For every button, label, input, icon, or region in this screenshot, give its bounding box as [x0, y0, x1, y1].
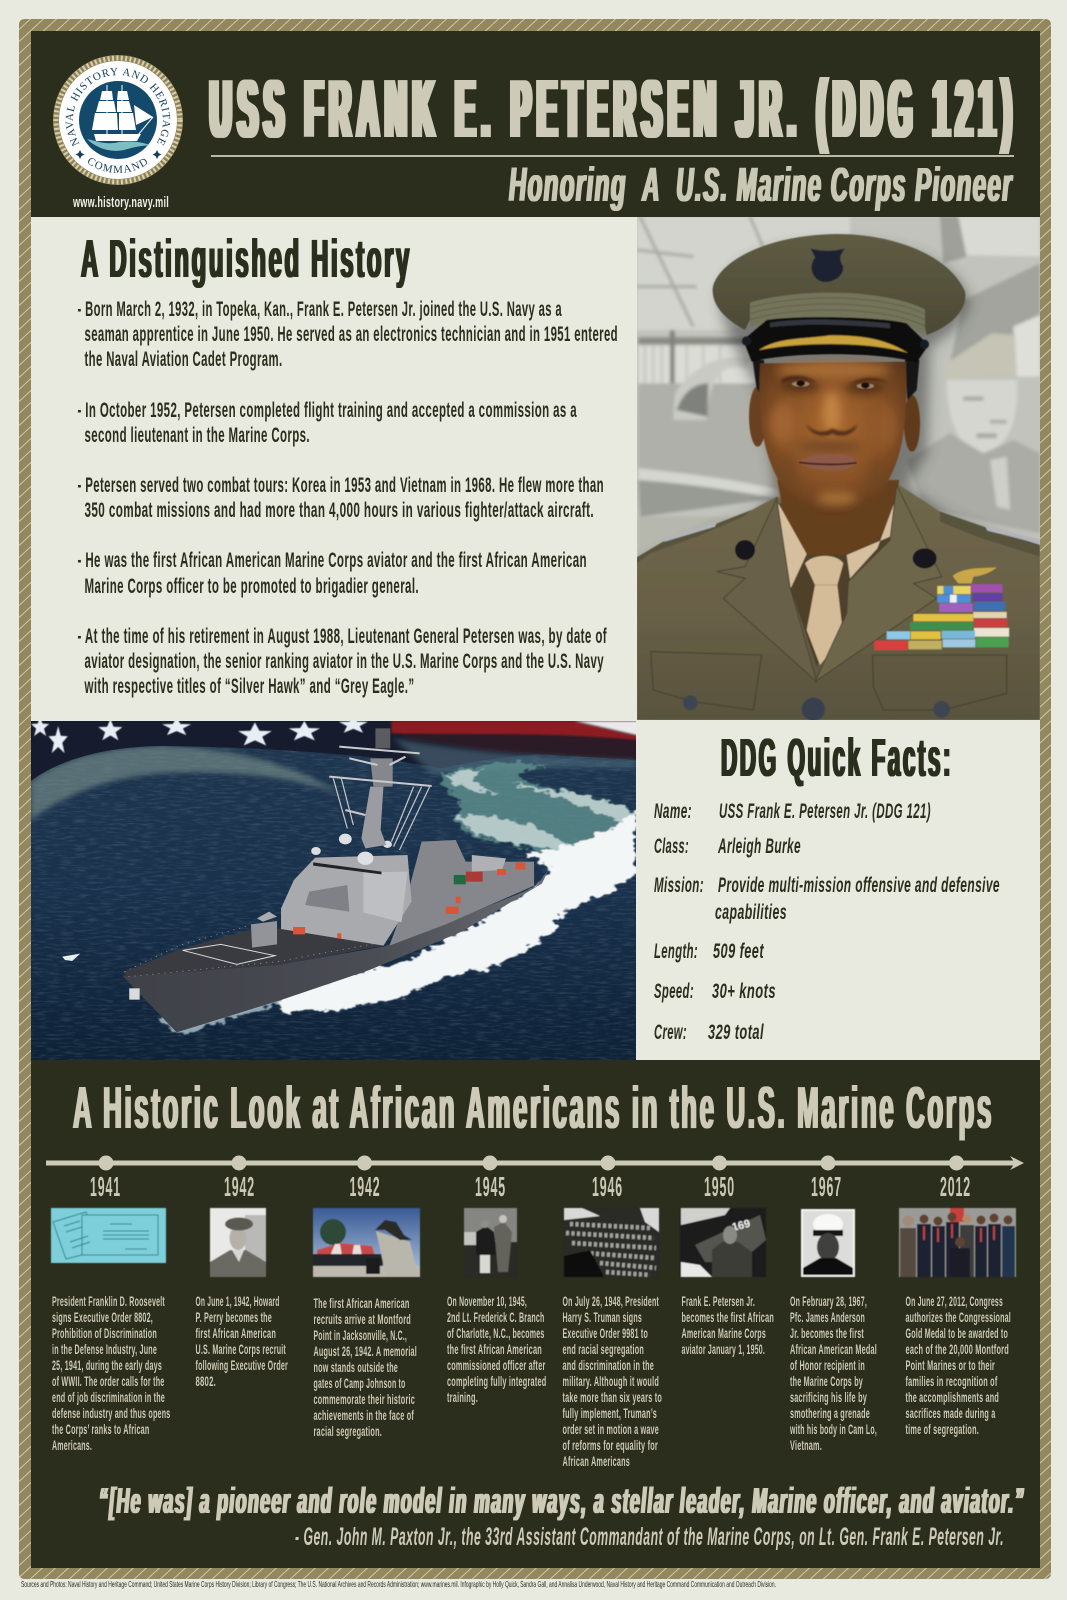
text: birth and enlistment [78, 298, 618, 371]
panel: a distinguished history: A Distinguished History [81, 229, 412, 289]
fact: mission: Mission: [654, 874, 704, 897]
text: 1945 Frederick C. Branch: training. [447, 1390, 478, 1405]
text: 1946 Truman order: Executive Order 9981 to [562, 1326, 648, 1341]
text: 1945 Frederick C. Branch: 2nd Lt. Frederick C. Branch [447, 1310, 544, 1325]
text: 1967 James Anderson Jr.: the Marine Corps by [790, 1374, 863, 1389]
text: 1967 James Anderson Jr. [789, 1294, 877, 1453]
text: 1967 James Anderson Jr.: with his body in Cam Lo, [789, 1422, 877, 1437]
text: 1967 James Anderson Jr.: smothering a grenade [790, 1406, 870, 1421]
text: 1942 Howard P. Perry: following Executive Order [196, 1358, 288, 1373]
text: first African American aviator: - He was the first African American Marine Corps aviator and the first African American [78, 549, 587, 572]
text: 1946 Truman order [562, 1294, 662, 1469]
text: 1942 Howard P. Perry: U.S. Marine Corps recruit [196, 1342, 286, 1357]
text: 1941 Executive Order 8802: of WWII. The order calls for the [52, 1374, 165, 1389]
text: 1942 Montford Point: gates of Camp Johnson to [314, 1376, 406, 1391]
thumbnail: Petersen with aircraft: 169 [731, 1218, 752, 1234]
fact: speed [654, 980, 776, 1003]
text: 1942 Montford Point: The first African American [314, 1296, 410, 1311]
text: 1946 Truman order: take more than six years to [562, 1390, 662, 1405]
text: commission: - In October 1952, Petersen completed flight training and accepted a commission as a [78, 399, 577, 422]
fact: mission: capabilities [715, 901, 787, 924]
text: 1942 Howard P. Perry: first African American [196, 1326, 276, 1341]
text: 1950 Petersen aviator: American Marine Corps [682, 1326, 766, 1341]
text: commission: second lieutenant in the Marine Corps. [84, 424, 310, 447]
text: 1942 Montford Point: August 26, 1942. A memorial [314, 1344, 417, 1359]
text: 1941 Executive Order 8802: 25, 1941, during the early days [52, 1358, 162, 1373]
text: 1945 Frederick C. Branch: completing fully integrated [447, 1374, 546, 1389]
text: 1967 James Anderson Jr.: of Honor recipient in [790, 1358, 865, 1373]
text: 1941 Executive Order 8802: signs Executive Order 8802, [52, 1310, 153, 1325]
text: retirement: with respective titles of “Silver Hawk” and “Grey Eagle.” [84, 675, 415, 698]
logo: Naval History and Heritage Command seal: COMMAND [88, 158, 147, 173]
text: 1950 Petersen aviator: Frank E. Petersen Jr. [682, 1294, 755, 1309]
fact: class: Class: [654, 835, 689, 858]
text: 1950 Petersen aviator: becomes the first African [682, 1310, 774, 1325]
panel: historic timeline: 2012 [940, 1171, 971, 1202]
text: 1941 Executive Order 8802: end of job discrimination in the [52, 1390, 165, 1405]
fact: name: Name: [654, 800, 692, 823]
thumbnail: Frederick C. Branch [464, 1208, 517, 1277]
year labels: 1942 [350, 1171, 380, 1202]
text: combat tours: 350 combat missions and had more than 4,000 hours in various fighter/attack aircraft. [84, 499, 594, 522]
text: 1950 Petersen aviator [682, 1294, 774, 1357]
text: 1946 Truman order: Harry S. Truman signs [562, 1310, 642, 1325]
year labels: 1950 [704, 1171, 735, 1202]
header band [31, 31, 1040, 217]
fact: crew: 329 total [708, 1021, 764, 1044]
text: 1950 Petersen aviator: aviator January 1, 1950. [682, 1342, 765, 1357]
thumbnail: Truman order, Marines in formation [564, 1208, 659, 1277]
title rule [211, 155, 1014, 157]
text: 1946 Truman order: of reforms for equality for [562, 1438, 658, 1453]
year labels: 1942 [224, 1171, 255, 1202]
year labels: 1967 [811, 1171, 842, 1202]
text: 1941 Executive Order 8802: in the Defense Industry, June [52, 1342, 157, 1357]
timeline arrow with markers [46, 1156, 1024, 1170]
text: 1945 Frederick C. Branch: commissioned officer after [447, 1358, 546, 1373]
head [749, 387, 766, 447]
text: 1946 Truman order: African Americans [562, 1454, 630, 1469]
text: 1945 Frederick C. Branch [447, 1294, 546, 1405]
text: 2012 Congressional Gold Medal: Point Marines or to their [906, 1358, 995, 1373]
thumbnail: Howard P. Perry [210, 1208, 266, 1277]
text: 1967 James Anderson Jr.: Jr. becomes the first [790, 1326, 864, 1341]
text: combat tours [78, 474, 604, 522]
text: 1946 Truman order: end racial segregation [562, 1342, 644, 1357]
text: 1967 James Anderson Jr.: Vietnam. [790, 1438, 822, 1453]
text: birth and enlistment: the Naval Aviation Cadet Program. [84, 348, 282, 371]
text: 1942 Montford Point: achievements in the face of [314, 1408, 414, 1423]
text: 1967 James Anderson Jr.: On February 28, 1967, [790, 1294, 867, 1309]
text: 1946 Truman order: military. Although it would [562, 1374, 659, 1389]
text: 1942 Howard P. Perry: 8802. [196, 1374, 216, 1389]
insignia and ribbons [662, 523, 1040, 544]
text: 1946 Truman order: and discrimination in the [562, 1358, 654, 1373]
text: 1941 Executive Order 8802: defense industry and thus opens [52, 1406, 170, 1421]
text: 1945 Frederick C. Branch: of Charlotte, N.C., becomes [447, 1326, 544, 1341]
text: 1942 Montford Point: racial segregation. [314, 1424, 382, 1439]
shirt and neck [778, 497, 897, 667]
pockets and buttons [651, 652, 1007, 710]
fact: length: Length: [654, 940, 698, 963]
text: 1941 Executive Order 8802: President Franklin D. Roosevelt [52, 1294, 165, 1309]
thumbnail: Petersen with aircraft [680, 1208, 766, 1277]
fact: length: 509 feet [713, 940, 764, 963]
text: 1945 Frederick C. Branch: On November 10, 1945, [447, 1294, 527, 1309]
text: 1942 Howard P. Perry: On June 1, 1942, Howard [196, 1294, 280, 1309]
logo: Naval History and Heritage Command seal [53, 55, 183, 185]
year labels: 1941 [90, 1171, 121, 1202]
text: 1967 James Anderson Jr.: African American Medal [790, 1342, 877, 1357]
text: 2012 Congressional Gold Medal [906, 1294, 1011, 1437]
fact: crew [654, 1021, 764, 1044]
panel: historic timeline [31, 1060, 1040, 1568]
logo: Naval History and Heritage Command seal: NAVAL HISTORY AND HERITAGE [66, 68, 170, 147]
fact: speed: 30+ knots [712, 980, 776, 1003]
text: 1941 Executive Order 8802: Prohibition of Discrimination [52, 1326, 157, 1341]
fact: crew: Crew: [654, 1021, 687, 1044]
thumbnail: Congressional Gold Medal recipients [899, 1208, 1016, 1277]
fact: name [654, 800, 931, 823]
text: 1942 Montford Point: recruits arrive at Montford [314, 1312, 411, 1327]
text: 1946 Truman order: fully implement, Truman’s [562, 1406, 657, 1421]
text: 1942 Howard P. Perry: P. Perry becomes the [196, 1310, 272, 1325]
jacket [637, 483, 1040, 720]
text: birth and enlistment: - Born March 2, 1932, in Topeka, Kan., Frank E. Petersen Jr. joined the U.S. Navy as a [78, 298, 562, 321]
text: 1946 Truman order: On July 26, 1948, President [562, 1294, 659, 1309]
text: 1941 Executive Order 8802 [52, 1294, 170, 1453]
text: commission [78, 399, 577, 447]
text: 2012 Congressional Gold Medal: time of segregation. [906, 1422, 979, 1437]
text: 1942 Howard P. Perry [196, 1294, 288, 1389]
fact: class [654, 835, 801, 858]
text: 1941 Executive Order 8802: Americans. [52, 1438, 92, 1453]
thumbnail: Montford Point memorial [313, 1208, 420, 1277]
text: retirement [78, 625, 607, 698]
photo: portrait of Lt. Gen. Petersen [630, 216, 1050, 723]
text: combat tours: - Petersen served two combat tours: Korea in 1953 and Vietnam in 1968. He flew more than [78, 474, 604, 497]
fact: mission [654, 874, 1000, 924]
text: 1967 James Anderson Jr.: Pfc. James Anderson [790, 1310, 865, 1325]
text: 1967 James Anderson Jr.: sacrificing his life by [790, 1390, 867, 1405]
text: birth and enlistment: seaman apprentice in June 1950. He served as an electronics technician and in 1951 entered [84, 323, 618, 346]
text: first African American aviator: Marine Corps officer to be promoted to brigadier general. [84, 575, 419, 598]
photo: destroyer at sea with flag [20, 715, 647, 1068]
text: 1942 Montford Point: commemorate their historic [314, 1392, 415, 1407]
thumbnail: executive order 8802 document [51, 1208, 166, 1263]
text: retirement: - At the time of his retirement in August 1988, Lieutenant General Petersen was, by date of [78, 625, 607, 648]
panel: DDG quick facts [636, 721, 1040, 1060]
thumbnail: James Anderson Jr. [801, 1209, 855, 1277]
text: retirement: aviator designation, the senior ranking aviator in the U.S. Marine Corps and the U.S. Navy [84, 650, 604, 673]
panel: a distinguished history [31, 217, 637, 721]
text: first African American aviator [78, 549, 587, 598]
fact: class: Arleigh Burke [717, 835, 801, 858]
year labels: 1945 [475, 1171, 506, 1202]
text: 1942 Montford Point: Point in Jacksonville, N.C., [314, 1328, 407, 1343]
year labels [90, 1171, 971, 1202]
text: 1942 Montford Point: now stands outside the [314, 1360, 398, 1375]
text: 1946 Truman order: order set in motion a wave [562, 1422, 659, 1437]
text: 1945 Frederick C. Branch: the first African American [447, 1342, 542, 1357]
cap [713, 234, 965, 335]
website url: www.history.navy.mil [72, 194, 169, 211]
year labels: 1946 [592, 1171, 623, 1202]
text: 1941 Executive Order 8802: the Corps’ ranks to African [52, 1422, 150, 1437]
text: 1942 Montford Point [314, 1296, 417, 1439]
fact: speed: Speed: [654, 980, 694, 1003]
